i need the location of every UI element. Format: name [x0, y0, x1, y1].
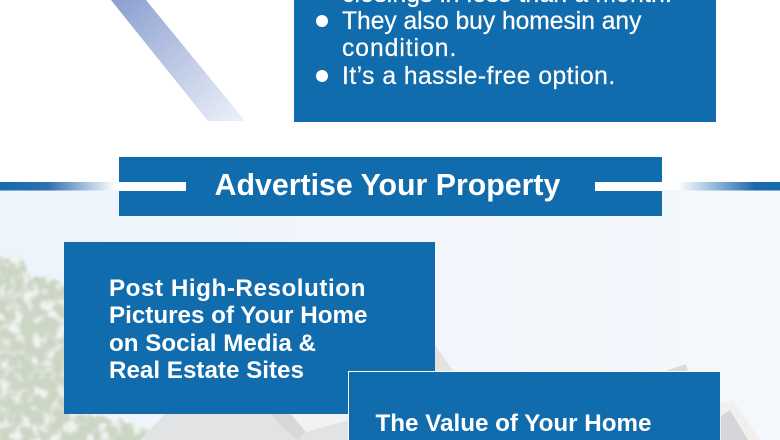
house roof — [140, 345, 760, 440]
diagonal ribbon — [111, 0, 245, 121]
heading banner — [118, 157, 662, 216]
bullet dot 1 — [316, 15, 328, 27]
panel heading: The Value of Your Home — [376, 410, 651, 437]
heading text: Advertise Your Property — [215, 168, 560, 202]
panel heading: on Social Media & — [109, 330, 316, 356]
bullet text: buy homes: They also buy homesin any — [342, 8, 641, 35]
sky — [0, 190, 780, 440]
panel heading: Post High-Resolution — [109, 274, 366, 302]
left gradient line — [0, 182, 119, 190]
bullet text: hassle-free: It’s a hassle-free option. — [342, 63, 616, 90]
banner right bar — [594, 182, 662, 191]
panel: post pictures — [64, 242, 435, 414]
bullet text: buy homes — [342, 8, 642, 62]
panel: benefits list — [294, 0, 716, 122]
banner left bar — [118, 182, 186, 191]
panel heading: Real Estate Sites — [109, 357, 304, 384]
bullet text: buy homes: condition. — [342, 35, 457, 62]
panel heading: Pictures of Your Home — [109, 302, 368, 329]
right gradient line — [678, 182, 780, 190]
trees — [0, 256, 175, 440]
panel: value of your home — [348, 371, 720, 440]
panel heading — [109, 274, 368, 384]
bullet dot 2 — [316, 70, 328, 82]
